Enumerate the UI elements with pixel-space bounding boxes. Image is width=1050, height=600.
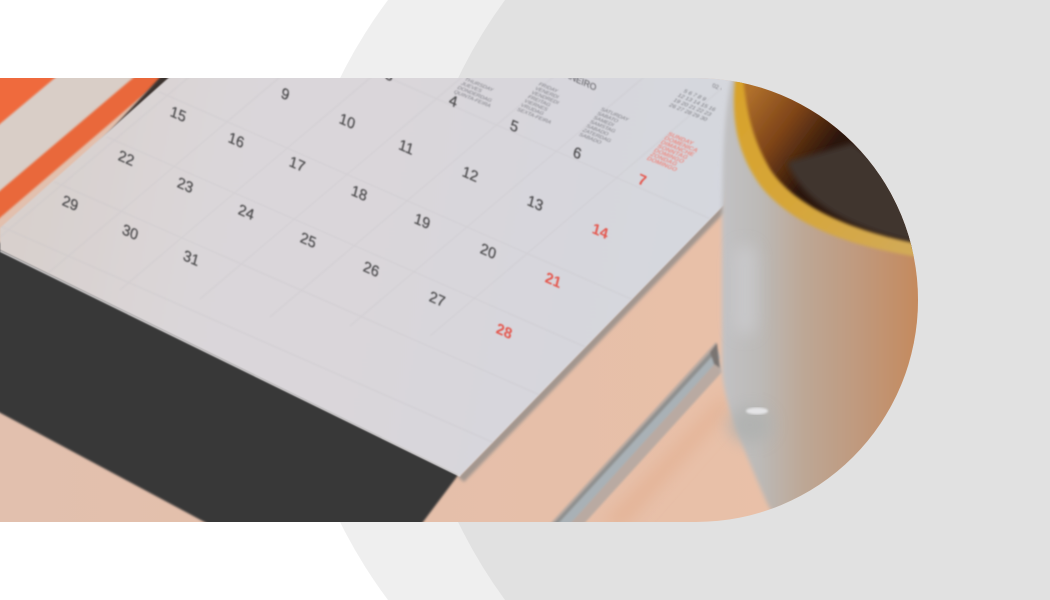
weekday name lists: [452, 77, 630, 148]
calendar day numbers: 13: [525, 192, 545, 215]
weekday name lists: FRIDAY: [537, 82, 560, 94]
red weekend numbers: 28: [494, 320, 514, 343]
calendar day numbers: 15: [168, 103, 188, 126]
weekday name lists: FREITAG: [526, 95, 552, 108]
cream folder area: [0, 78, 134, 191]
calendar day numbers: 30: [120, 221, 140, 244]
grid lines: [0, 0, 826, 543]
page lower edge highlight: [0, 251, 460, 476]
shadow beside pen: [610, 403, 724, 522]
weekday name lists: SEXTA-FEIRA: [515, 107, 553, 126]
weekday name lists: SATURDAY: [599, 107, 630, 123]
calendar day numbers: 11: [397, 136, 415, 159]
calendar day numbers: 4: [447, 92, 459, 112]
cup left highlight: [738, 250, 756, 330]
weekday name lists: VRIJDAG: [519, 103, 545, 117]
background: darker grey circle: [407, 0, 1050, 600]
coffee surface: [786, 142, 910, 242]
pen dark stripe: [554, 352, 712, 522]
weekday name lists: QUINTA-FEIRA: [452, 90, 492, 109]
pen on the table: [548, 342, 722, 526]
mini calendar: 26 27 28 29 30: [667, 103, 708, 123]
weekday name lists: SAMEDI: [592, 115, 615, 128]
red weekday list: SUNDAY: [666, 131, 696, 147]
pen highlight: [556, 350, 720, 526]
red weekday list: DOMINGO: [645, 156, 679, 173]
mini calendar: 12 13 14 15 16: [676, 93, 717, 113]
photo base: table surface: [0, 78, 918, 522]
red weekday list: SONNTAG: [655, 144, 689, 161]
calendar day numbers: 16: [226, 129, 246, 152]
calendar day numbers: 22: [116, 147, 136, 170]
calendar day numbers: [60, 66, 583, 311]
calendar day numbers: 19: [412, 210, 432, 233]
month title: JANEIRO: [559, 67, 597, 93]
calendar day numbers: 27: [427, 288, 447, 311]
cup: [722, 72, 925, 526]
calendar day numbers: 18: [349, 182, 369, 205]
red weekend numbers: 14: [590, 220, 610, 244]
weekday name lists: VENERDI: [533, 86, 560, 100]
pen clip shade: [710, 343, 720, 368]
red weekend numbers: 21: [543, 269, 563, 292]
yellow rim: [734, 72, 925, 258]
orange strip: [0, 78, 161, 220]
red weekday list: DOMINGO: [652, 148, 686, 165]
weekday name lists: JUEVES: [459, 81, 483, 94]
red weekend numbers: 7: [636, 171, 648, 191]
red weekday list: [646, 132, 698, 172]
calendar day numbers: 6: [571, 144, 583, 164]
calendar page: [0, 72, 740, 476]
weekday name lists: THURSDAY: [463, 77, 495, 93]
calendar day numbers: 3: [383, 66, 395, 86]
glass base shade: [728, 407, 772, 443]
calendar day numbers: 5: [508, 117, 520, 137]
calendar day numbers: 29: [60, 192, 80, 215]
calendar day numbers: 26: [361, 258, 381, 281]
weekday name lists: DONDERDAG: [456, 85, 493, 104]
calendar grid and text: [61, 78, 722, 340]
shadow along the strip: [106, 78, 170, 134]
photo: calendar and coffee pill: [0, 78, 918, 522]
mini calendar: 02 - 20: [712, 83, 731, 96]
calendar page thickness: [458, 203, 725, 482]
calendar day numbers: 20: [478, 240, 498, 263]
calendar day numbers: 24: [236, 201, 256, 224]
calendar day numbers: 25: [298, 229, 318, 252]
weekday name lists: SABADO: [584, 124, 610, 137]
red weekday list: DOMENICA: [662, 135, 700, 154]
weekday name lists: SAMSTAG: [588, 120, 617, 134]
background: light grey circle: [288, 0, 1050, 600]
orange folder corner: [0, 78, 57, 126]
red weekday list: ZONDAG: [648, 152, 679, 167]
mini calendar: [668, 83, 722, 122]
calendar day numbers: 23: [175, 174, 195, 197]
mini calendar: 5 6 7 8 9: [682, 89, 707, 102]
calendar day numbers: 10: [337, 110, 357, 133]
weekday name lists: VIERNES: [522, 99, 549, 113]
weekday name lists: SABATO: [595, 111, 619, 124]
calendar day numbers: 12: [460, 163, 480, 186]
mini calendar: 19 20 21 22 23: [671, 98, 712, 118]
cup body: [722, 72, 925, 526]
weekday name lists: SABADO: [577, 132, 603, 145]
calendar day numbers: 9: [279, 85, 291, 105]
coffee shadow: [738, 82, 912, 250]
weekday name lists: VENDREDI: [530, 90, 560, 106]
calendar day numbers: 31: [181, 247, 201, 270]
weekday name lists: ZATERDAG: [581, 128, 612, 144]
red weekday list: DIMANCHE: [659, 139, 696, 158]
pen outer stripe: [548, 342, 722, 526]
red weekend numbers: [494, 171, 648, 343]
base glint: [746, 408, 768, 414]
black band: [0, 240, 462, 526]
calendar day numbers: 17: [287, 153, 307, 176]
